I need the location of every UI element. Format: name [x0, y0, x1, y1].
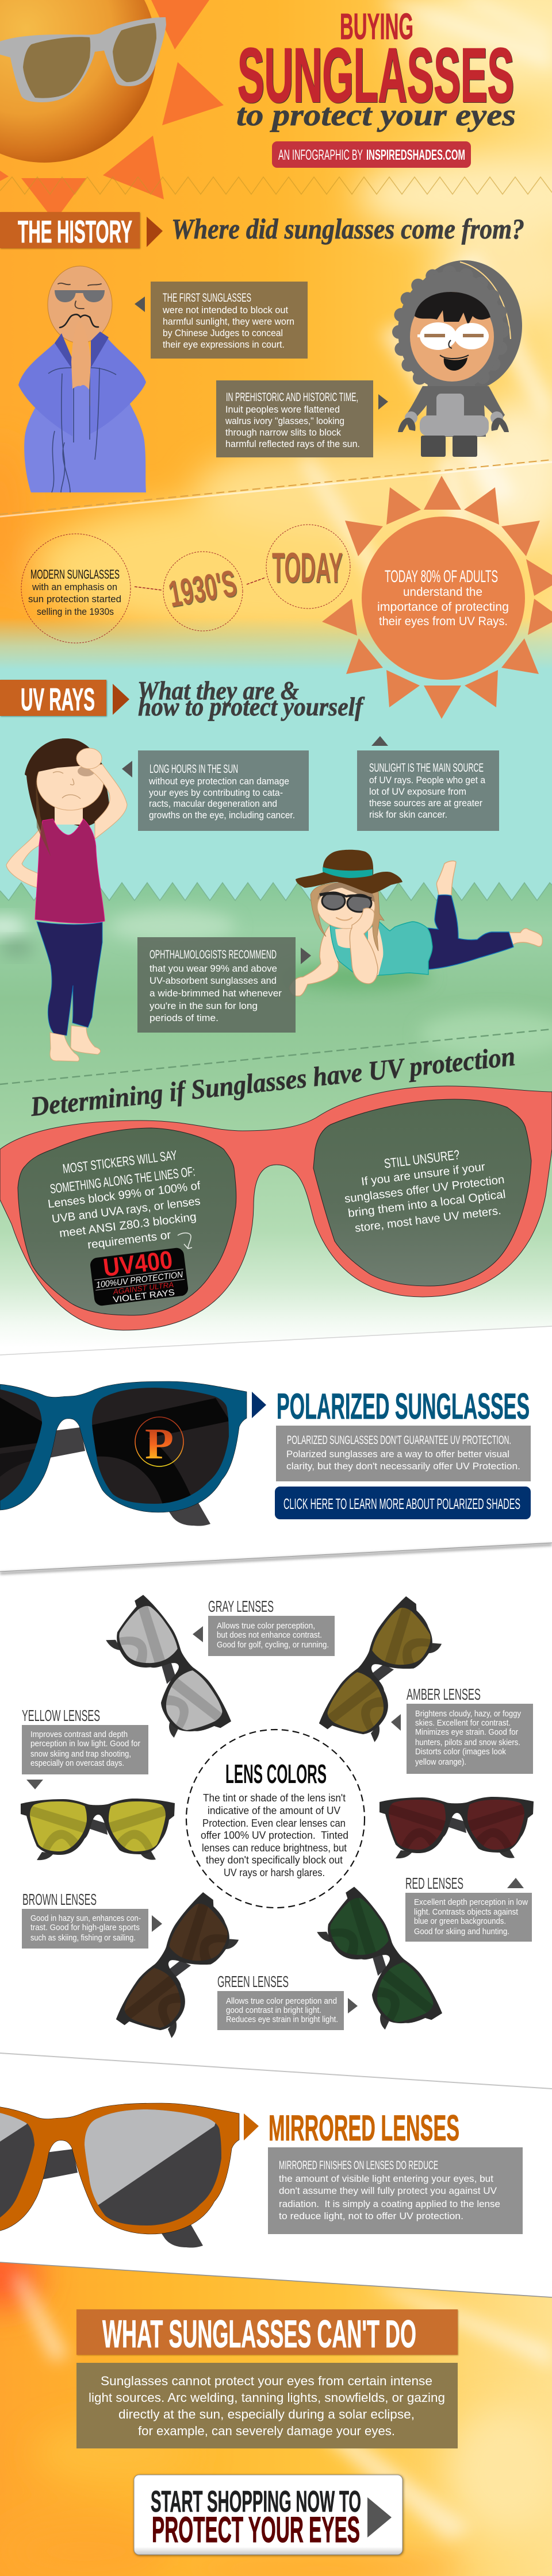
- body: [148, 776, 295, 821]
- body: [377, 586, 509, 628]
- body: walrus ivory "glasses," looking: [225, 415, 344, 426]
- heading: MODERN SUNGLASSES: [30, 567, 120, 582]
- brown glasses: [112, 1889, 250, 2051]
- body: were not intended to block out: [162, 305, 288, 315]
- uv400 badge: [89, 1244, 189, 1307]
- credit pill: [272, 141, 471, 168]
- big red sunglasses: [0, 1086, 552, 1330]
- arrow: [113, 684, 129, 715]
- round white glasses: [417, 322, 489, 350]
- lenses: [85, 2109, 221, 2225]
- hair: [310, 882, 384, 951]
- lens colors: green: [217, 1884, 446, 2046]
- call to action button: [134, 2475, 402, 2555]
- info box: the amount of visible light entering your eyes, but: [279, 2173, 493, 2184]
- arrow: [507, 1878, 524, 1888]
- timeline: 1930s: [163, 552, 243, 631]
- arrow: [348, 1998, 358, 2013]
- face: [37, 753, 103, 810]
- paper zigzag divider: [0, 177, 552, 194]
- parka hood: [399, 272, 503, 390]
- timeline: modern sunglasses: [21, 534, 131, 643]
- uv400 badge: AGAINST ULTRA: [112, 1280, 174, 1296]
- sun with rays and sunglasses: [0, 0, 224, 221]
- left lens text: Lenses block 99% or 100% of: [47, 1180, 201, 1211]
- box: light. Contrasts objects against: [414, 1907, 519, 1917]
- info box: to reduce light, not to offer UV protection.: [279, 2211, 463, 2221]
- polarized section text: [252, 1387, 531, 1519]
- yellow glasses: [21, 1799, 175, 1860]
- heading: YELLOW LENSES: [22, 1707, 100, 1724]
- box: Allows true color perception,: [217, 1621, 315, 1631]
- right lens text: STILL UNSURE?: [383, 1147, 461, 1171]
- script subtitle: What they are &: [137, 676, 299, 705]
- temple arms: [49, 1427, 210, 1526]
- body text: for example, can severely damage your eyes.: [138, 2424, 395, 2438]
- body text: directly at the sun, especially during a solar eclipse,: [118, 2407, 415, 2421]
- body: indicative of the amount of UV: [208, 1805, 340, 1816]
- arrow: [152, 1915, 162, 1932]
- title line: Buying: BUYING: [340, 6, 413, 47]
- box: snow skiing and trap shooting,: [30, 1749, 131, 1759]
- box: [208, 1616, 335, 1656]
- banner: [76, 2309, 458, 2355]
- mirrored orange sunglasses: [0, 2101, 239, 2248]
- body: [150, 963, 282, 1023]
- timeline: today: [266, 525, 350, 609]
- box: Good in hazy sun, enhances con-: [30, 1913, 141, 1923]
- timeline: today: TODAY: [272, 545, 343, 591]
- body: their eyes from UV Rays.: [379, 615, 508, 628]
- info box: [268, 2147, 523, 2234]
- body: without eye protection can damage: [148, 776, 289, 787]
- body box: [76, 2363, 458, 2448]
- box: trast. Good for high-glare sports: [30, 1923, 140, 1932]
- title: [236, 6, 516, 168]
- face: [317, 885, 375, 929]
- cta line two: PROTECT YOUR EYES: [152, 2510, 360, 2550]
- body: growths on the eye, including cancer.: [149, 810, 295, 821]
- script heading: determining uv protection: Determining if Sunglasses have UV protection: [29, 1041, 517, 1122]
- body: [406, 386, 505, 437]
- box: good contrast in bright light.: [226, 2005, 321, 2015]
- body: [28, 582, 121, 617]
- left lens text: meet ANSI Z80.3 blocking: [59, 1211, 197, 1240]
- title line: to protect your eyes: to protect your eyes: [236, 98, 516, 132]
- body: your eyes by contributing to cata-: [149, 787, 283, 798]
- panel: what sunglasses can't do: [76, 2309, 458, 2448]
- left lens text: SOMETHING ALONG THE LINES OF:: [49, 1164, 196, 1196]
- arrow: [244, 2113, 259, 2140]
- polarized logo: [135, 1417, 183, 1468]
- callout: sunlight main source: [357, 736, 499, 831]
- body: The tint or shade of the lens isn't: [203, 1792, 346, 1804]
- dress: [35, 819, 105, 923]
- feet: [50, 1033, 79, 1061]
- body: lot of UV exposure from: [369, 786, 466, 797]
- box: Allows true color perception and: [226, 1996, 337, 2006]
- box: [217, 1991, 344, 2030]
- left lens text: MOST STICKERS WILL SAY: [62, 1148, 178, 1176]
- body text: Sunglasses cannot protect your eyes from certain intense: [101, 2374, 432, 2388]
- heading: OPHTHALMOLOGISTS RECOMMEND: [150, 948, 277, 961]
- banner: [0, 212, 140, 248]
- right lens text: store, most have UV meters.: [354, 1204, 502, 1235]
- body: by Chinese Judges to conceal: [163, 328, 283, 338]
- gray glasses: [97, 1592, 235, 1754]
- credit pill: INSPIREDSHADES.COM: [366, 147, 465, 163]
- connector: [247, 577, 266, 584]
- info box: don't assume they will fully protect you against UV: [279, 2185, 497, 2196]
- info box: MIRRORED FINISHES ON LENSES DO REDUCE: [279, 2159, 438, 2172]
- heading: LONG HOURS IN THE SUN: [150, 763, 238, 776]
- collar: [55, 333, 74, 368]
- box: yellow orange).: [415, 1757, 466, 1767]
- body: [201, 1792, 348, 1878]
- body: offer 100% UV protection. Tinted: [201, 1830, 348, 1841]
- connector: [135, 587, 162, 590]
- arrow: [378, 394, 388, 410]
- box: Good for golf, cycling, or running.: [217, 1640, 329, 1650]
- amber glasses: [315, 1593, 453, 1755]
- body: you're in the sun for long: [150, 1000, 258, 1011]
- dashed circle: [21, 534, 131, 643]
- mirrored section text: [244, 2108, 523, 2234]
- big sun with statistic: [322, 476, 552, 719]
- disc: [362, 517, 525, 680]
- body: that you wear 99% and above: [150, 963, 277, 974]
- box: hunters, pilots and snow skiers.: [415, 1738, 520, 1747]
- arrow: [371, 736, 388, 746]
- pants: [427, 895, 513, 969]
- box: especially on overcast days.: [30, 1758, 124, 1768]
- body: risk for skin cancer.: [369, 809, 447, 820]
- callout: prehistoric: [216, 380, 388, 457]
- body: they don't specifically block out: [206, 1854, 343, 1866]
- lens colors: center circle: [186, 1730, 365, 1908]
- timeline: 1930s: 1930'S: [166, 562, 240, 615]
- dashed circle: [186, 1730, 365, 1908]
- body: lenses can reduce brightness, but: [202, 1842, 347, 1854]
- red glasses: [379, 1797, 534, 1858]
- body: their eye expressions in court.: [163, 339, 285, 350]
- heading: GRAY LENSES: [208, 1597, 274, 1615]
- character: inuit person: [398, 260, 522, 457]
- body: sun protection started: [28, 594, 121, 604]
- body: UV rays or harsh glares.: [224, 1867, 325, 1878]
- arrow: [26, 1780, 43, 1789]
- arrow: [122, 761, 132, 777]
- uv400 badge: UV400: [102, 1246, 174, 1282]
- box: perception in low light. Good for: [30, 1739, 140, 1749]
- right lens text: If you are unsure if your: [361, 1161, 486, 1188]
- heading: AMBER LENSES: [407, 1685, 481, 1703]
- body: Inuit peoples wore flattened: [225, 404, 340, 415]
- body: importance of protecting: [377, 600, 509, 614]
- hat: [296, 850, 402, 894]
- box: [151, 282, 308, 359]
- body: a wide-brimmed hat whenever: [150, 988, 282, 999]
- body: [225, 404, 360, 449]
- box: but does not enhance contrast.: [217, 1630, 322, 1640]
- box: such as skiing, fishing or sailing.: [30, 1933, 136, 1943]
- heading: LENS COLORS: [225, 1759, 327, 1789]
- rays: [322, 476, 552, 719]
- body: [369, 775, 485, 820]
- rear foot: [509, 929, 542, 946]
- box: [216, 380, 373, 457]
- lens colors: brown: [22, 1889, 250, 2051]
- body: harmful sunlight, they were worn: [163, 316, 294, 327]
- heading: GREEN LENSES: [217, 1973, 289, 1990]
- box: [405, 1893, 532, 1942]
- character: reclining girl with hat: [289, 850, 542, 996]
- left lens text: requirements or: [87, 1229, 172, 1252]
- lens colors: gray: [97, 1592, 335, 1754]
- box: Minimizes eye strain. Good for: [415, 1727, 518, 1737]
- raised arm: [86, 764, 127, 839]
- credit pill: AN INFOGRAPHIC BY: [278, 147, 363, 163]
- box: Reduces eye strain in bright light.: [226, 2015, 338, 2024]
- info box: Polarized sunglasses are a way to offer better visual: [286, 1449, 509, 1460]
- arrow: [367, 2497, 392, 2538]
- raised foot: [436, 861, 456, 895]
- right lens: [313, 1099, 531, 1286]
- left lens text: [47, 1148, 201, 1252]
- box: [22, 1909, 148, 1949]
- lens colors: red: [379, 1797, 534, 1942]
- box: [137, 937, 296, 1033]
- character: standing girl shading eyes: [6, 738, 127, 1061]
- arrow: [135, 297, 145, 312]
- box: Good for skiing and hunting.: [414, 1927, 509, 1936]
- body: understand the: [403, 586, 482, 599]
- uv400 badge: VIOLET RAYS: [113, 1288, 175, 1305]
- heading: IN PREHISTORIC AND HISTORIC TIME,: [226, 391, 358, 404]
- banner label: UV RAYS: [21, 681, 95, 717]
- box: [407, 1704, 533, 1774]
- body: racts, macular degeneration and: [149, 798, 277, 809]
- body text: light sources. Arc welding, tanning lights, snowfields, or gazing: [89, 2390, 445, 2405]
- box: blue or green backgrounds.: [414, 1916, 506, 1926]
- arrow: [147, 217, 163, 247]
- green glasses: [308, 1884, 446, 2046]
- info box: [276, 1426, 531, 1481]
- box: Improves contrast and depth: [30, 1730, 128, 1739]
- button: [275, 1487, 531, 1519]
- frame: [0, 1086, 552, 1330]
- script subtitle: [137, 676, 365, 721]
- box: Distorts color (images look: [415, 1747, 506, 1757]
- left lens: [18, 1128, 236, 1315]
- body: UV-absorbent sunglasses and: [150, 975, 277, 986]
- icon: curved arrow: [178, 1233, 192, 1249]
- face: [410, 292, 494, 382]
- body text: [89, 2374, 445, 2438]
- lens colors: yellow: [21, 1707, 175, 1860]
- body: [162, 305, 294, 350]
- heading: RED LENSES: [405, 1874, 463, 1892]
- polarized logo: P: [145, 1420, 174, 1468]
- frame: [0, 2103, 239, 2234]
- lens colors: amber: [315, 1593, 533, 1774]
- body: Protection. Even clear lenses can: [202, 1818, 346, 1829]
- body and arm: [289, 924, 384, 996]
- right lens text: sunglasses offer UV Protection: [344, 1173, 505, 1206]
- box: skies. Excellent for contrast.: [415, 1718, 511, 1728]
- arrow: [391, 1714, 401, 1731]
- lenses: [92, 1388, 229, 1504]
- body: through narrow slits to block: [225, 427, 341, 438]
- body: harmful reflected rays of the sun.: [225, 438, 360, 449]
- arm on cheek: [350, 908, 378, 984]
- body: periods of time.: [150, 1012, 218, 1023]
- section heading: uv rays: [0, 676, 365, 721]
- box: [22, 1725, 148, 1774]
- box: [357, 750, 499, 831]
- script subtitle: how to protect yourself: [138, 692, 365, 721]
- right lens text: [344, 1147, 507, 1235]
- box: Excellent depth perception in low: [414, 1897, 528, 1907]
- body: these sources are at greater: [369, 798, 482, 808]
- body: of UV rays. People who get a: [369, 775, 485, 785]
- character: chinese judge: [18, 266, 146, 492]
- cta line one: START SHOPPING NOW TO: [151, 2485, 361, 2519]
- leggings: [37, 922, 102, 1035]
- banner label: THE HISTORY: [18, 214, 132, 249]
- head: [48, 266, 112, 343]
- info box: radiation. It is simply a coating applied to the lense: [279, 2198, 500, 2209]
- callout: first sunglasses: [135, 282, 308, 359]
- arrow: [301, 948, 311, 964]
- box: Brightens cloudy, hazy, or foggy: [415, 1709, 521, 1719]
- arrow: [252, 1392, 266, 1418]
- heading: THE FIRST SUNGLASSES: [163, 291, 251, 305]
- heading: BROWN LENSES: [22, 1890, 97, 1908]
- section heading: the history: [0, 212, 524, 249]
- body: with an emphasis on: [32, 582, 117, 592]
- arrow: [193, 1626, 203, 1642]
- left lens text: UVB and UVA rays, or lenses: [51, 1195, 201, 1226]
- callout: ophthalmologists: [137, 937, 311, 1033]
- banner: [0, 680, 106, 716]
- body: selling in the 1930s: [37, 606, 114, 617]
- right lens text: bring them into a local Optical: [347, 1188, 507, 1220]
- polarized blue sunglasses: [0, 1381, 247, 1526]
- frame: [0, 1381, 247, 1512]
- sunglasses: [319, 892, 372, 912]
- uv400 badge: 100%UV PROTECTION: [95, 1270, 183, 1290]
- callout: long hours: [122, 750, 309, 831]
- praying hands: [71, 320, 91, 390]
- info box: clarity, but they don't necessarily offer UV Protection.: [286, 1461, 520, 1472]
- temple arms: [41, 2149, 203, 2248]
- teal top: [330, 921, 432, 975]
- box: [138, 750, 309, 831]
